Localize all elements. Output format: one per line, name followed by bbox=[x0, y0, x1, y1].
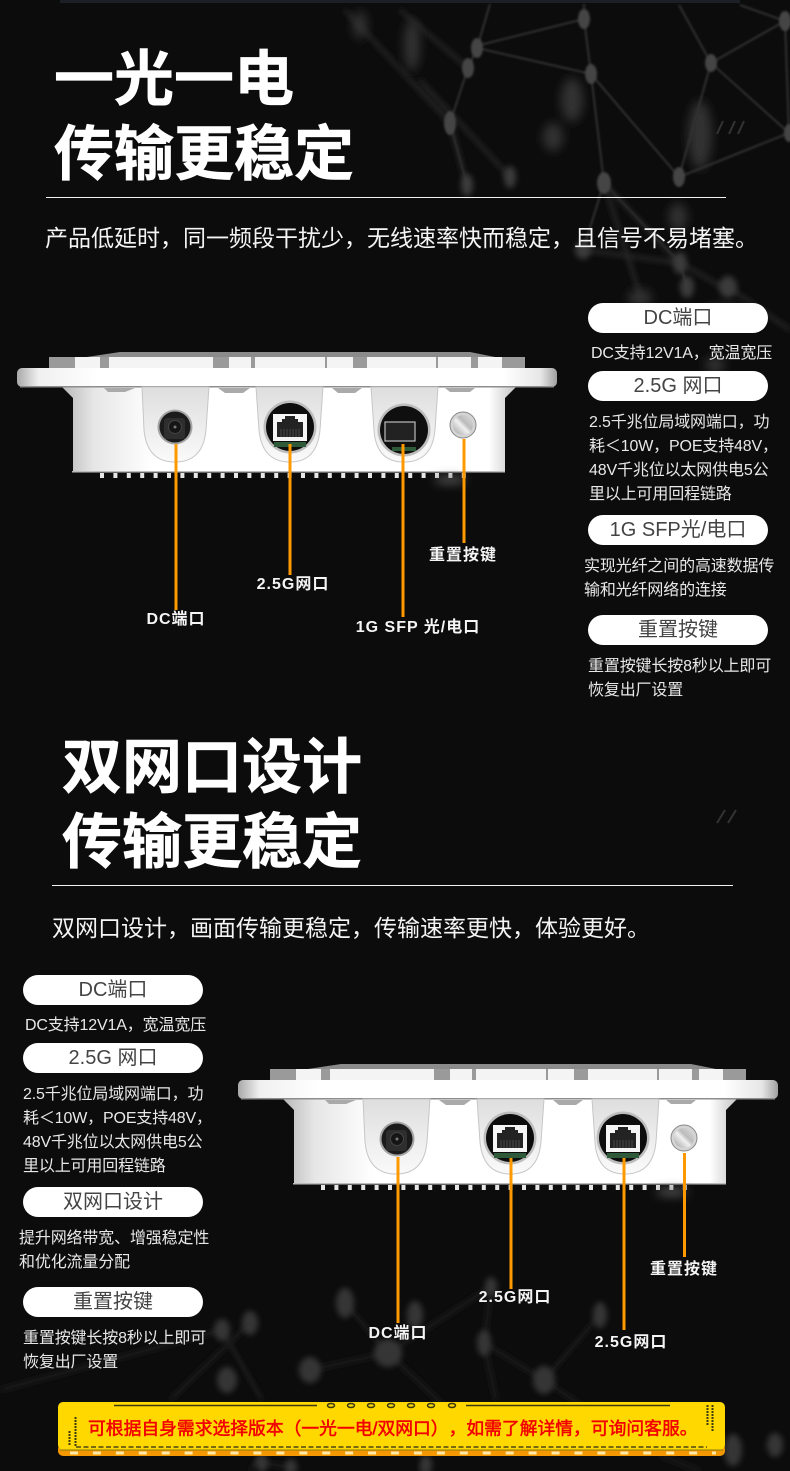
description: 48V千兆位以太网供电5公 bbox=[23, 1134, 202, 1151]
heading: 双网口设计 传输更稳定: 传输更稳定 bbox=[62, 809, 362, 876]
callout label: 2.5G网口 bbox=[595, 1334, 667, 1351]
description bbox=[23, 1329, 206, 1371]
description: 输和光纤网络的连接 bbox=[584, 582, 727, 599]
pill bbox=[588, 515, 768, 545]
bottom network bbox=[0, 1287, 700, 1471]
description: 实现光纤之间的高速数据传 bbox=[584, 558, 774, 575]
callout label: 2.5G网口 bbox=[257, 576, 329, 593]
pill: DC端口 bbox=[644, 307, 712, 329]
port: SFP bbox=[378, 404, 430, 456]
pill: 重置按键 bbox=[73, 1291, 153, 1313]
description: 恢复出厂设置 bbox=[588, 682, 683, 699]
description: 2.5千兆位局域网端口，功 bbox=[23, 1086, 203, 1103]
pill: DC端口 bbox=[79, 979, 147, 1001]
heading: 一光一电 传输更稳定: 传输更稳定 bbox=[54, 121, 354, 188]
pill bbox=[23, 1287, 203, 1317]
description: DC支持12V1A，宽温宽压 bbox=[591, 345, 772, 362]
pill bbox=[23, 1187, 203, 1217]
callout label: DC端口 bbox=[368, 1325, 428, 1342]
callout label: 2.5G网口 bbox=[479, 1289, 551, 1306]
heading: 双网口设计 传输更稳定 bbox=[62, 734, 362, 876]
heading rule bbox=[46, 197, 726, 198]
description: DC支持12V1A，宽温宽压 bbox=[25, 1017, 206, 1034]
callout label: 1G SFP 光/电口 bbox=[356, 619, 480, 636]
description: 耗＜10W，POE支持48V， bbox=[23, 1110, 212, 1127]
description: 2.5千兆位局域网端口，功 bbox=[589, 414, 769, 431]
pill: 2.5G 网口 bbox=[69, 1047, 157, 1069]
description: 和优化流量分配 bbox=[19, 1254, 130, 1271]
description: 提升网络带宽、增强稳定性 bbox=[19, 1230, 209, 1247]
pill bbox=[588, 615, 768, 645]
pill bbox=[588, 371, 768, 401]
device: dual ethernet bbox=[238, 1064, 778, 1188]
description: 里以上可用回程链路 bbox=[589, 486, 732, 503]
device: one fiber one copper bbox=[17, 352, 557, 476]
heading rule bbox=[52, 885, 733, 886]
heading: 双网口设计 传输更稳定: 双网口设计 bbox=[62, 734, 362, 801]
heading: 一光一电 传输更稳定: 一光一电 bbox=[54, 46, 294, 113]
callout label: 重置按键 bbox=[650, 1261, 718, 1278]
pill bbox=[23, 975, 203, 1005]
description: 重置按键长按8秒以上即可 bbox=[588, 658, 771, 675]
description bbox=[584, 557, 774, 599]
pill bbox=[23, 1043, 203, 1073]
intro text: 产品低延时，同一频段干扰少，无线速率快而稳定，且信号不易堵塞。 bbox=[45, 225, 758, 251]
pill: 重置按键 bbox=[638, 619, 718, 641]
description: 48V千兆位以太网供电5公 bbox=[589, 462, 768, 479]
description bbox=[19, 1229, 209, 1271]
callout lines: second device bbox=[398, 1153, 684, 1330]
pill bbox=[588, 303, 768, 333]
glow below devices bbox=[434, 477, 688, 1195]
description: 恢复出厂设置 bbox=[23, 1354, 118, 1371]
banner text: 可根据自身需求选择版本（一光一电/双网口），如需了解详情，可询问客服。 bbox=[88, 1418, 698, 1438]
description bbox=[589, 413, 778, 503]
callout label: DC端口 bbox=[146, 611, 206, 628]
description bbox=[588, 657, 771, 699]
panel: second device specs bbox=[19, 975, 212, 1371]
description: 重置按键长按8秒以上即可 bbox=[23, 1330, 206, 1347]
callout label: 重置按键 bbox=[429, 547, 497, 564]
pill: 双网口设计 bbox=[63, 1191, 163, 1213]
description: 耗＜10W，POE支持48V， bbox=[589, 438, 778, 455]
heading: 一光一电 传输更稳定 bbox=[54, 46, 354, 188]
intro text: 双网口设计，画面传输更稳定，传输速率更快，体验更好。 bbox=[52, 915, 650, 941]
callout lines: first device bbox=[176, 439, 464, 617]
pill: 2.5G 网口 bbox=[634, 375, 722, 397]
panel: first device specs bbox=[584, 303, 778, 699]
description bbox=[23, 1085, 212, 1175]
description: 里以上可用回程链路 bbox=[23, 1158, 166, 1175]
pill: 1G SFP光/电口 bbox=[610, 519, 746, 541]
